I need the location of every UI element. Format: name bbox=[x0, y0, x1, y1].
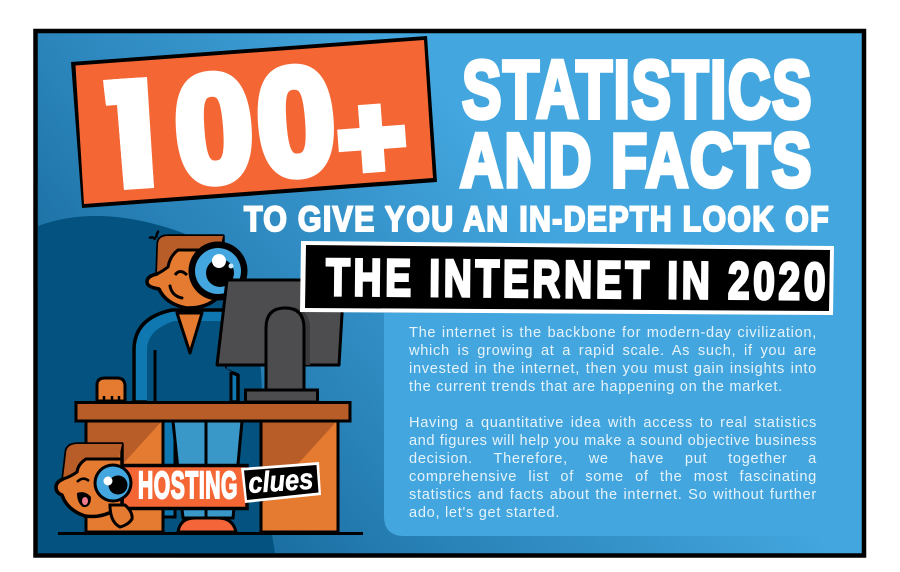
text block: introduction: Having a quantitative idea with access to real statistics bbox=[409, 414, 817, 430]
badge: 100+: 0 bbox=[169, 42, 259, 215]
text block: introduction: decision. Therefore, we have put together a bbox=[409, 450, 817, 466]
text block: introduction: statistics and facts about the internet. So without further bbox=[409, 486, 817, 502]
fingers bbox=[104, 396, 119, 401]
dark background hill bbox=[38, 216, 275, 553]
logo tongue bbox=[82, 497, 88, 505]
leg divider bbox=[204, 421, 208, 532]
badge: 100+: + bbox=[333, 71, 410, 204]
arm line bbox=[155, 350, 231, 402]
desk top bbox=[76, 402, 350, 421]
head bbox=[147, 236, 223, 308]
text block: introduction: invested in the internet, then you must gain insights into bbox=[409, 360, 817, 376]
logo banner bbox=[122, 466, 247, 508]
hand bbox=[97, 378, 125, 401]
shoes bbox=[178, 518, 236, 532]
logo hair bbox=[63, 444, 122, 479]
text block: introduction: the current trends that are happening on the market. bbox=[409, 378, 783, 394]
badge: 100+: 0 bbox=[251, 35, 341, 208]
badge: 100+ bbox=[71, 36, 437, 208]
right pedestal bbox=[261, 421, 338, 532]
logo magnifier bbox=[94, 464, 132, 502]
back leg bbox=[163, 421, 175, 517]
logo hand bbox=[110, 505, 132, 527]
logo: hosting clues bbox=[56, 444, 321, 527]
left pedestal bbox=[86, 421, 163, 532]
wink bbox=[175, 272, 187, 275]
magnifier bbox=[188, 242, 248, 300]
logo text: clues: clues bbox=[247, 464, 314, 500]
logo hairline bbox=[63, 459, 121, 479]
monitor base bbox=[246, 390, 318, 402]
hair bbox=[157, 236, 223, 274]
right pedestal shade bbox=[262, 422, 336, 503]
text block: introduction: The internet is the backbone for modern-day civilization, bbox=[409, 324, 817, 340]
monitor stand bbox=[266, 308, 304, 391]
torso bbox=[147, 321, 232, 402]
heading: and facts: AND FACTS bbox=[460, 118, 813, 204]
left pedestal shade bbox=[88, 422, 161, 503]
text block: introduction: comprehensive list of some of the most fascinating bbox=[409, 468, 817, 484]
monitor bbox=[217, 280, 344, 365]
logo head bbox=[56, 444, 122, 517]
panel: intro background bbox=[384, 313, 862, 536]
illustration: person at desk bbox=[58, 231, 363, 535]
logo mouth bbox=[77, 492, 91, 507]
hairline bbox=[157, 250, 222, 274]
badge: 100+: 1 bbox=[74, 37, 179, 227]
logo box: clues bbox=[241, 462, 321, 503]
text block: introduction: which is growing at a rapid scale. As such, if you are bbox=[409, 342, 817, 358]
text block: introduction bbox=[409, 324, 817, 520]
smile bbox=[170, 286, 182, 298]
stand shadow bbox=[283, 306, 310, 365]
text block: introduction: and figures will help you make a sound objective business bbox=[409, 432, 817, 448]
ground line bbox=[58, 532, 363, 535]
arms and torso bbox=[134, 310, 238, 402]
jeans bbox=[173, 421, 242, 518]
neck bbox=[177, 313, 202, 353]
hair tuft bbox=[149, 231, 159, 240]
logo wink bbox=[77, 479, 89, 482]
text block: introduction: ado, let's get started. bbox=[409, 504, 560, 520]
logo text: hosting: HOSTING bbox=[138, 465, 238, 507]
